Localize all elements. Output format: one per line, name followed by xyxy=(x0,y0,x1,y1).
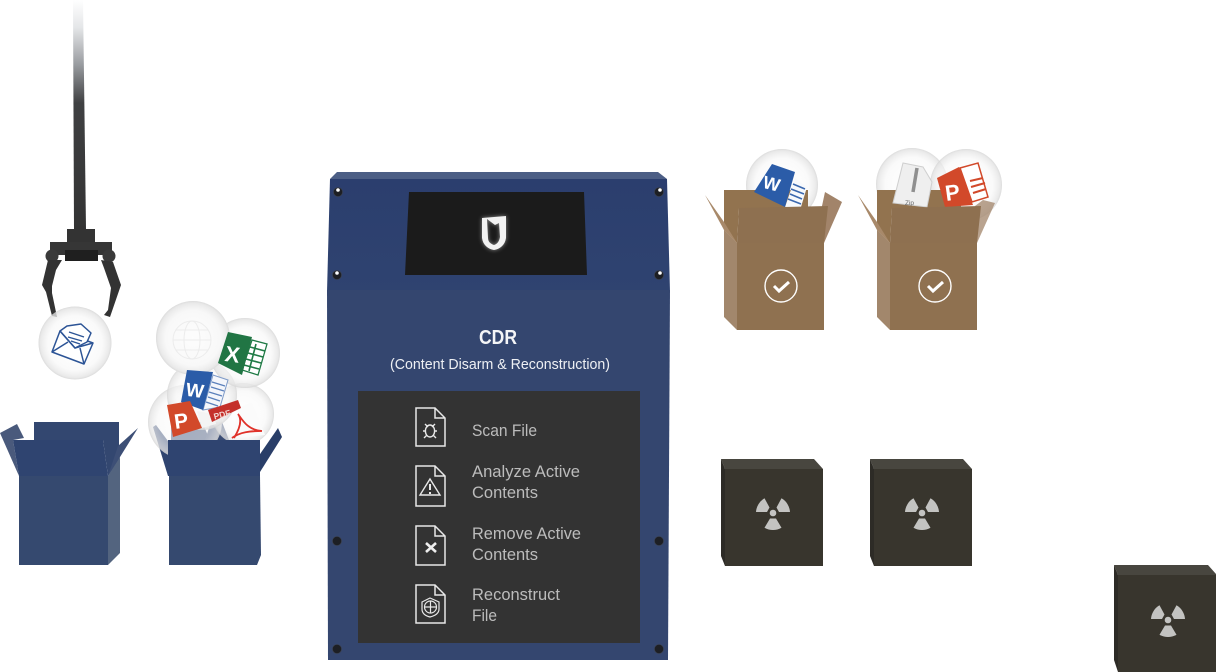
step: scan file xyxy=(416,408,537,446)
display screen xyxy=(405,192,587,275)
icon: PowerPoint with PDF tag: P xyxy=(173,409,190,434)
sealed dark box 1 xyxy=(721,459,823,566)
clean brown box with zip and PowerPoint spheres xyxy=(858,148,1002,330)
icon: envelope xyxy=(52,324,93,364)
icon: radiation xyxy=(1151,605,1185,637)
rivets xyxy=(332,188,664,654)
glass spheres behind box xyxy=(876,148,1002,221)
icon: Word: W xyxy=(184,380,205,403)
icon: PDF acrobat xyxy=(232,402,265,438)
icon: globe watermark xyxy=(173,321,211,359)
icon: PowerPoint xyxy=(937,163,988,207)
icon: radiation xyxy=(905,498,939,530)
icon: Word: W xyxy=(761,172,782,196)
icon: zip file xyxy=(893,163,932,207)
icon: bug xyxy=(423,424,437,438)
icon: Word xyxy=(181,370,228,410)
rivet highlights xyxy=(335,188,662,275)
CDR machine xyxy=(327,172,670,660)
icon: PowerPoint with PDF tag xyxy=(167,400,241,437)
sphere: email held by claw xyxy=(38,306,112,380)
glass sphere behind box xyxy=(746,149,818,221)
icon: U shield logo xyxy=(482,216,506,250)
icon: zip file: Zip xyxy=(905,200,914,207)
step: scan file: Scan File xyxy=(472,422,537,440)
icon: radiation xyxy=(756,498,790,530)
heading: CDR: CDR xyxy=(479,327,517,349)
step: reconstruct file: File xyxy=(472,607,497,625)
subheading: (Content Disarm & Reconstruction) xyxy=(390,356,610,373)
sealed dark box 3 xyxy=(1114,565,1216,672)
step: remove active contents: Contents xyxy=(472,546,538,564)
open blue box, full front xyxy=(168,440,261,565)
step: reconstruct file xyxy=(416,585,560,625)
icon: Word xyxy=(754,164,807,207)
icon: PowerPoint with PDF tag: PDF xyxy=(213,408,232,421)
sphere cluster with document icons xyxy=(148,301,280,459)
icon: check circle xyxy=(765,270,797,302)
panel: process steps xyxy=(358,391,640,643)
sealed dark box 2 xyxy=(870,459,972,566)
step: analyze active contents xyxy=(416,463,580,506)
icon: Excel: X xyxy=(223,341,242,368)
icon: cross xyxy=(426,543,436,552)
step: analyze active contents: Analyze Active xyxy=(472,463,580,481)
blue box back flaps, full box xyxy=(153,422,282,476)
icon: warning triangle xyxy=(420,479,440,495)
step: analyze active contents: Contents xyxy=(472,484,538,502)
step: remove active contents xyxy=(416,525,581,565)
step: reconstruct file: Reconstruct xyxy=(472,586,560,604)
blue box back flaps, empty box xyxy=(0,422,138,476)
icon: Excel xyxy=(218,332,267,375)
icon: shield grid xyxy=(422,598,439,617)
icon: PowerPoint: P xyxy=(943,179,961,206)
icon: check circle xyxy=(919,270,951,302)
robot claw xyxy=(42,0,121,317)
open blue box, empty front xyxy=(13,440,120,565)
step: remove active contents: Remove Active xyxy=(472,525,581,543)
clean brown box with Word sphere xyxy=(705,149,842,330)
